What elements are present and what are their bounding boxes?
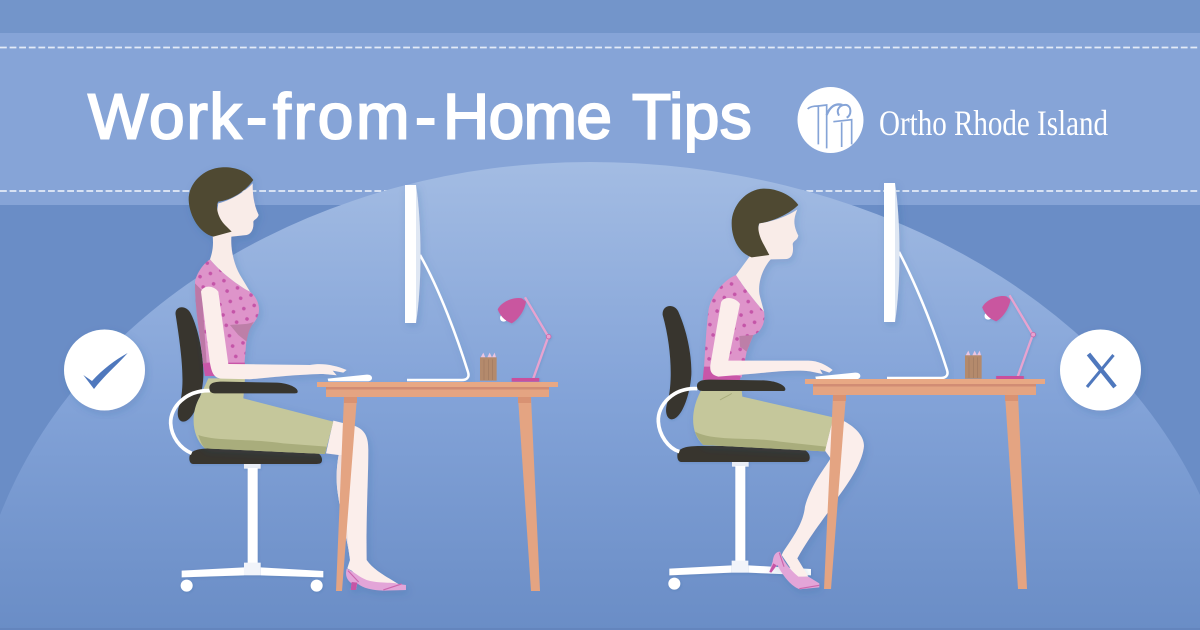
- chair: [176, 307, 323, 592]
- woman sitting upright: [189, 167, 406, 591]
- scene: poor posture: [658, 183, 1045, 590]
- desk lamp: [498, 297, 551, 382]
- keyboard: [328, 375, 372, 381]
- skirt: [194, 378, 333, 454]
- title: Tips: [632, 80, 752, 152]
- arm: [201, 287, 347, 379]
- dome backdrop: [0, 162, 1200, 628]
- scene: correct posture: [171, 167, 558, 592]
- chair: [663, 306, 811, 590]
- shoe: [346, 569, 406, 591]
- icon: check mark badge: [64, 330, 145, 410]
- armrest and back ring: [171, 382, 298, 453]
- desk: [805, 379, 1045, 589]
- blouse: [195, 259, 259, 376]
- icon: cross mark badge: [1060, 330, 1141, 410]
- desk lamp: [982, 295, 1035, 380]
- shoe: [769, 552, 819, 589]
- logo: Ortho Rhode Island: [798, 87, 1108, 153]
- title: from: [273, 80, 412, 152]
- title: Work: [88, 80, 243, 152]
- blouse: [703, 275, 764, 380]
- woman slouching: [693, 189, 864, 589]
- keyboard: [815, 373, 860, 379]
- skirt: [693, 389, 833, 451]
- legs: [782, 417, 864, 577]
- legs: [326, 421, 398, 585]
- title: -: [246, 80, 267, 152]
- title: -: [415, 80, 436, 152]
- armrest and back ring: [658, 380, 785, 452]
- arm: [710, 298, 833, 377]
- far leg shading: [337, 455, 350, 568]
- torso and head: [189, 167, 259, 292]
- torso and head: [732, 189, 798, 312]
- logo: Ortho Rhode Island: Ortho Rhode Island: [879, 103, 1108, 143]
- desk: [317, 382, 558, 591]
- pencil cup: [965, 351, 982, 379]
- title: Home: [443, 80, 611, 152]
- pencil cup: [480, 353, 497, 381]
- monitor: [884, 183, 948, 378]
- monitor: [405, 185, 469, 380]
